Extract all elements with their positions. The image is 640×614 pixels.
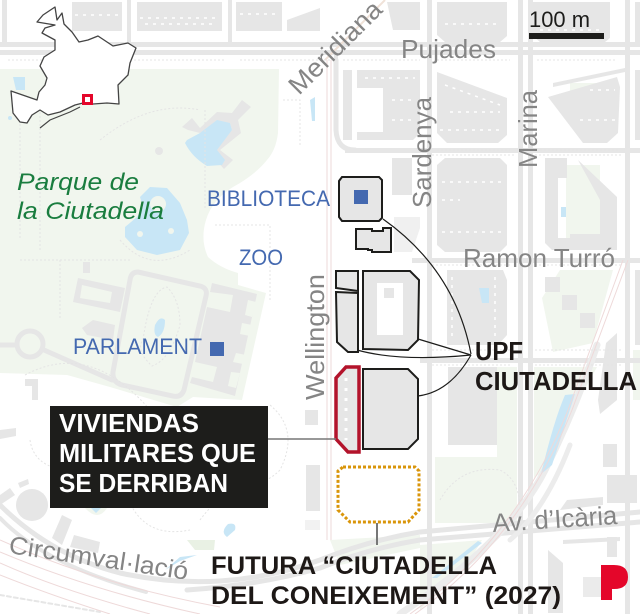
callout: viviendas militares: VIVIENDAS xyxy=(59,408,199,438)
green window cut-outs xyxy=(228,300,256,388)
building: courtyard inner xyxy=(384,288,394,298)
building: UPF south xyxy=(363,369,418,449)
label: Parque de la Ciutadella: la Ciutadella xyxy=(17,198,164,225)
marker: Biblioteca xyxy=(354,190,368,204)
locator marker xyxy=(84,96,92,104)
building: UPF courtyard block xyxy=(363,271,419,350)
leader: future xyxy=(376,523,378,545)
logo xyxy=(601,565,628,600)
courtyard xyxy=(377,283,403,335)
leader lines: UPF xyxy=(357,219,471,396)
building: UPF small north xyxy=(336,271,358,291)
label: UPF Ciutadella: UPF xyxy=(475,336,523,366)
callout: viviendas militares: SE DERRIBAN xyxy=(59,468,228,498)
label: Zoo: ZOO xyxy=(239,245,283,270)
park: Ciutadella xyxy=(0,69,279,407)
label: Futura Ciutadella del Coneixement: FUTURA “CIUTADELLA xyxy=(211,552,497,580)
label: Sardenya: Sardenya xyxy=(407,96,437,208)
scale bar: 100 m xyxy=(529,7,590,32)
water xyxy=(8,77,575,578)
block speckles xyxy=(75,14,615,340)
building: Biblioteca xyxy=(339,177,382,221)
scale bar xyxy=(529,7,604,39)
green areas xyxy=(85,83,640,610)
callout: viviendas militares: MILITARES QUE xyxy=(59,438,256,468)
building: UPF west xyxy=(336,292,358,352)
footpaths xyxy=(8,60,622,532)
label: Meridiana: Meridiana xyxy=(282,0,388,100)
label: Wellington: Wellington xyxy=(300,274,330,400)
label: Parque de la Ciutadella: Parque de xyxy=(17,169,139,196)
building: UPF annex xyxy=(356,228,391,252)
label: Marina: Marina xyxy=(513,89,543,168)
label: Ramon Turró: Ramon Turró xyxy=(463,243,615,273)
label: UPF Ciutadella xyxy=(475,336,637,396)
label: Parlament: PARLAMENT xyxy=(73,334,202,359)
callout: viviendas militares xyxy=(50,406,268,508)
locator map: Barcelona xyxy=(11,7,136,128)
label: Futura Ciutadella del Coneixement: DEL CONEIXEMENT” (2027) xyxy=(211,582,561,610)
label: Parque de la Ciutadella xyxy=(17,169,164,225)
label: Futura Ciutadella del Coneixement xyxy=(211,552,561,610)
label: Av. d'Icària: Av. d’Icària xyxy=(491,500,619,538)
windows xyxy=(344,378,348,440)
lake islands xyxy=(137,196,174,237)
label: UPF Ciutadella: CIUTADELLA xyxy=(475,366,637,396)
label: Pujades: Pujades xyxy=(401,34,496,64)
label: Circumval·lació: Circumval·lació xyxy=(7,531,190,586)
building: demolition housing xyxy=(336,367,359,452)
building: future Ciutadella del Coneixement xyxy=(338,467,419,522)
marker: Parlament xyxy=(210,342,224,356)
label: Biblioteca: BIBLIOTECA xyxy=(207,186,330,211)
leader: housing xyxy=(266,438,336,440)
